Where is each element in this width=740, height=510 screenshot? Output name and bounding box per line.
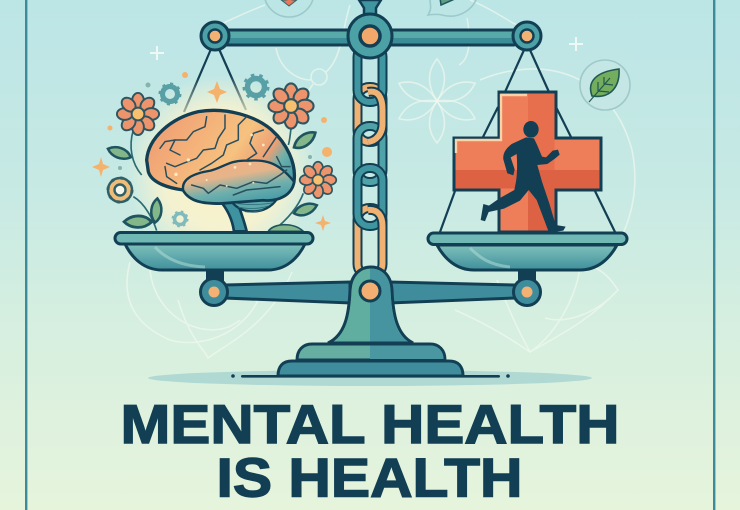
title line 1: MENTAL HEALTH [120,393,620,455]
chain link: teal lower [358,168,382,226]
sparkle dots [174,134,265,187]
icon: heart badge [264,0,314,17]
chain overlap: orange lower over teal [368,210,382,236]
lower left pivot [200,278,228,306]
base upper step [297,344,445,360]
chain overlap: orange over teal [368,92,382,142]
icon: speech bubble leaf [428,0,477,16]
gears [160,75,268,226]
chain link: teal middle [358,126,382,182]
base lower step [278,361,463,376]
lower right pivot [514,278,540,306]
left top pivot [201,22,229,50]
right top pivot [513,22,541,50]
left flowers and leaves [92,72,336,265]
scale [148,0,592,386]
stems [131,127,303,231]
top pivot [348,14,392,58]
ground line [231,374,510,378]
chain [358,45,382,276]
sparkles [92,72,332,231]
flowers [117,93,159,135]
left strings [184,49,246,112]
red cross [454,92,601,232]
ground shadow [148,370,592,386]
right strings [440,50,615,232]
right pan [428,233,627,270]
pan stems [206,268,536,282]
background line art [127,0,635,358]
top connector [359,0,381,16]
top beam [225,30,515,45]
left pan [115,232,313,270]
folds [160,115,290,195]
decorative plus signs [150,37,583,60]
leaves [106,130,319,231]
chain link: top teal [358,45,382,102]
title [120,393,620,508]
chain link: orange lower [358,208,382,276]
brain stem [219,200,247,231]
small yellow flower [108,178,132,202]
runner silhouette [481,121,566,233]
chain link: orange upper [358,87,382,142]
icon: leaf badge [580,60,630,110]
cerebellum lines [235,203,273,212]
lower beam [225,282,515,303]
title line 2: IS HEALTH [216,446,522,508]
cerebellum [230,198,277,211]
cortex [147,110,294,203]
glow behind brain [127,75,317,265]
cross shading [456,170,600,230]
brain [147,110,294,231]
temporal lobe [183,160,294,203]
column [328,267,413,343]
